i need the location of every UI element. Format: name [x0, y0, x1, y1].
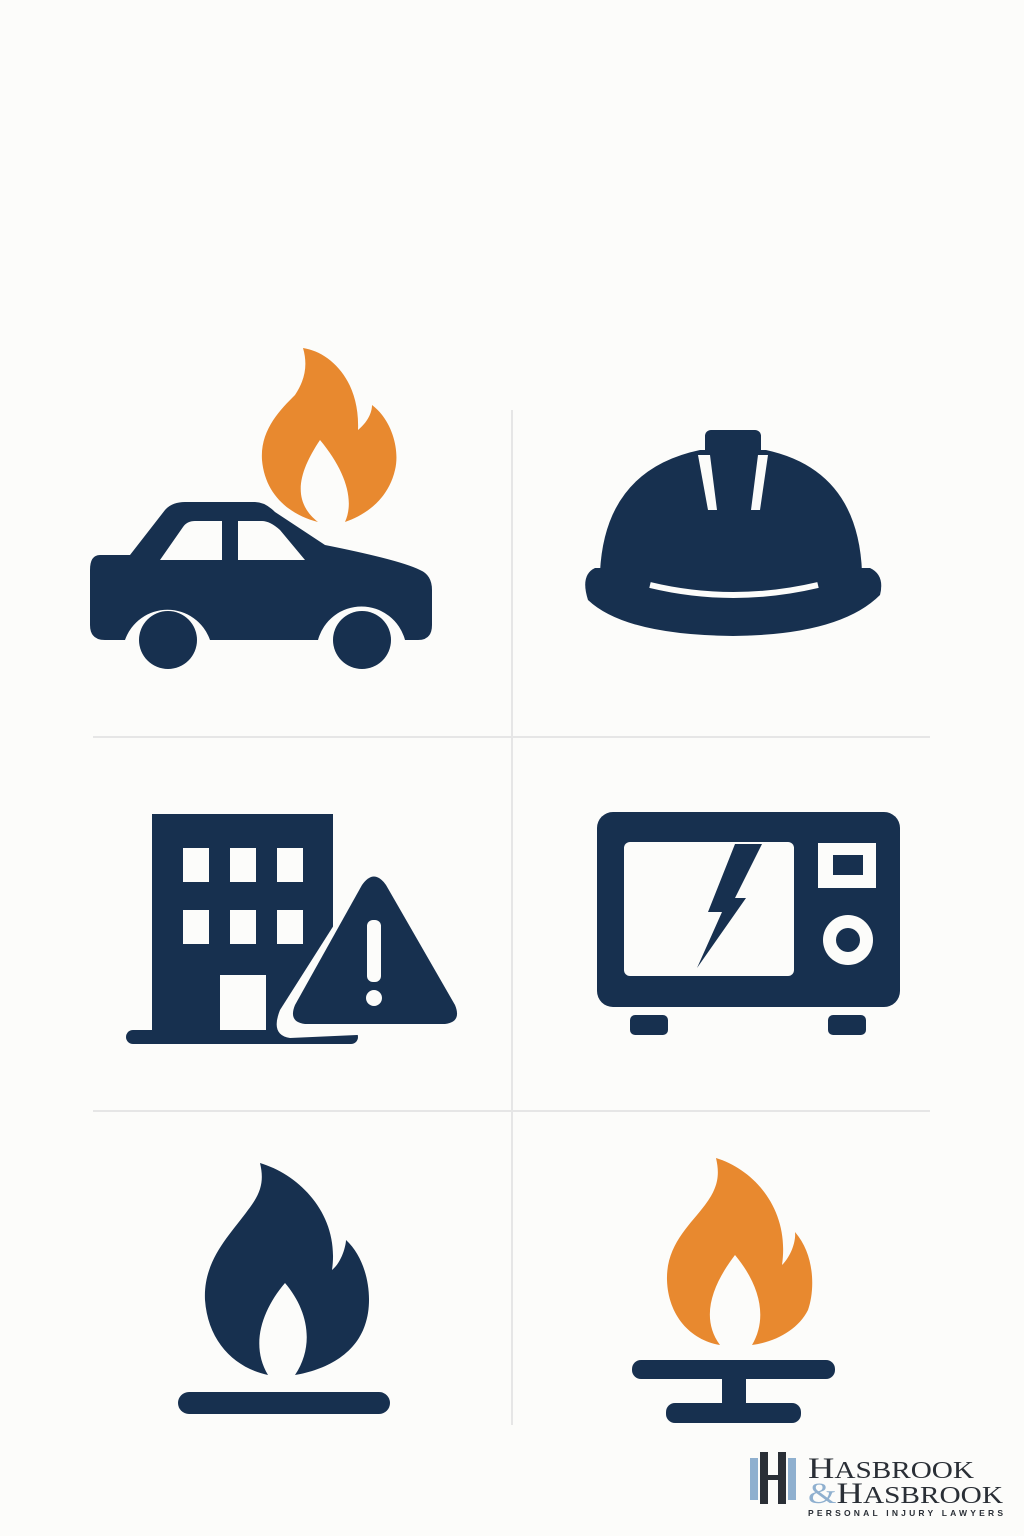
logo: PERSONAL INJURY LAWYERS [808, 1508, 1003, 1518]
icon: flame [178, 1163, 390, 1414]
icon: gas burner flame [632, 1158, 835, 1423]
icon: building with warning [126, 814, 470, 1044]
icon: car on fire [90, 348, 432, 669]
logo [750, 1452, 1004, 1518]
logo: HASBROOK [808, 1452, 975, 1485]
icon: hard hat [585, 430, 881, 636]
logo: &HASBROOK [808, 1477, 1004, 1510]
icon: microwave [597, 812, 900, 1035]
